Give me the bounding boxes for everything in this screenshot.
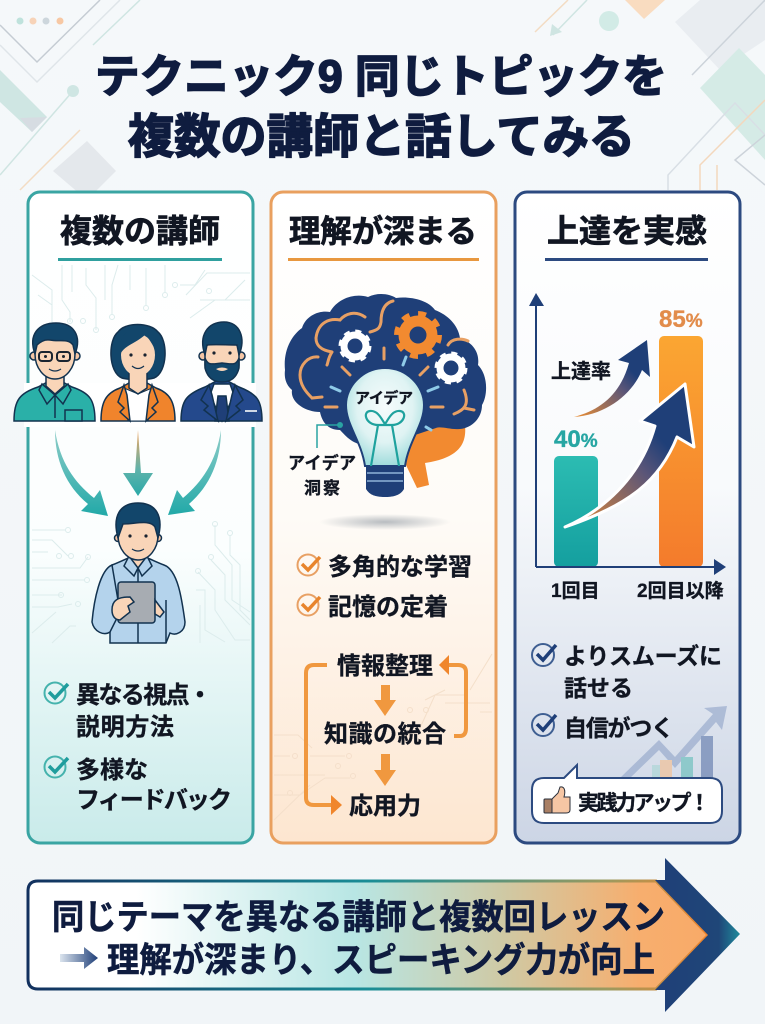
checklist: instructors: フィードバック <box>76 787 232 814</box>
x labels: 2回目以降 <box>637 580 724 602</box>
checklist: understanding: 記憶の定着 <box>328 594 448 621</box>
callout: practical skill up <box>532 765 722 823</box>
bulb glass <box>346 368 424 466</box>
callout line <box>317 422 343 448</box>
label in bulb: アイデア <box>355 389 413 407</box>
title <box>95 51 667 163</box>
checklist: instructors: 説明方法 <box>76 714 174 741</box>
x labels: 1回目 <box>551 581 600 602</box>
brain folds <box>300 301 474 414</box>
x labels <box>551 580 724 602</box>
background growth graphic <box>620 706 727 778</box>
banner body <box>28 881 708 989</box>
checklist: progress: 話せる <box>564 675 633 701</box>
bar chart <box>529 293 726 602</box>
label: 上達率: 上達率 <box>551 360 611 383</box>
banner text: 同じテーマを異なる講師と複数回レッスン <box>52 899 665 937</box>
gear: white left <box>342 332 368 360</box>
icon: brain with light bulb <box>285 294 486 530</box>
arrow: middle instructor to student <box>123 430 153 496</box>
panel: deeper understanding <box>271 192 496 843</box>
value: 85%: 85% <box>659 306 703 333</box>
callout: practical skill up: 実践力アップ！ <box>578 792 710 815</box>
bar: second lesson onward <box>659 336 703 567</box>
check icon <box>298 554 320 576</box>
flow diagram <box>306 653 466 820</box>
orange brain stem <box>406 425 465 488</box>
brain <box>285 294 486 445</box>
arrow: down <box>374 685 396 716</box>
icon: instructor with glasses <box>14 323 95 421</box>
arrow: small rising <box>574 340 650 417</box>
panel frame: orange <box>271 192 496 843</box>
heading: 複数の講師: 複数の講師 <box>60 213 220 249</box>
checklist: understanding: 多角的な学習 <box>328 554 472 581</box>
arrow: right instructor to student <box>168 430 221 515</box>
checklist: progress <box>532 643 722 741</box>
checklist: understanding <box>298 554 472 621</box>
light rays <box>325 348 443 430</box>
checklist: progress: 自信がつく <box>564 715 674 741</box>
flow diagram: 知識の統合 <box>324 721 446 748</box>
icon: thumbs up <box>544 787 570 813</box>
check icon <box>298 594 320 616</box>
banner text: 理解が深まり、スピーキング力が向上 <box>107 941 655 980</box>
filament <box>366 411 404 466</box>
flow diagram: 応用力 <box>349 793 421 820</box>
value: 40%: 40% <box>554 426 598 453</box>
panel: feel the progress <box>515 192 740 843</box>
heading: 上達を実感: 上達を実感 <box>547 213 707 249</box>
bar: first lesson <box>554 456 598 567</box>
check icon <box>44 682 68 704</box>
check icon <box>532 714 556 736</box>
summary banner arrow <box>28 858 740 1012</box>
arrow: down <box>374 754 396 786</box>
bulb base <box>366 466 404 497</box>
heading: 理解が深まる: 理解が深まる <box>289 213 477 249</box>
callout label: 洞察 <box>304 479 340 498</box>
checklist: instructors <box>44 682 232 814</box>
panel: multiple instructors <box>14 192 262 843</box>
title: テクニック9 同じトピックを <box>95 51 667 102</box>
arrow: loop right <box>439 655 466 736</box>
panel frame: teal <box>28 192 253 843</box>
checklist: progress: よりスムーズに <box>564 643 722 669</box>
background decoration <box>0 0 765 200</box>
icon: female instructor <box>101 324 175 421</box>
checklist: instructors: 異なる視点・ <box>76 682 212 709</box>
bulb shadow <box>319 514 451 530</box>
callout label: アイデア <box>288 453 356 473</box>
title: 複数の講師と話してみる <box>128 110 635 163</box>
arrow: big rising <box>565 384 694 527</box>
panel frame: navy <box>515 192 740 843</box>
gear: orange <box>398 315 438 355</box>
check icon <box>532 644 556 666</box>
arrow: left instructor to student <box>55 430 108 516</box>
checklist: instructors: 多様な <box>76 757 148 784</box>
icon: student with tablet <box>92 503 185 643</box>
circuit decoration <box>274 654 492 820</box>
flow diagram: 情報整理 <box>337 653 433 680</box>
circuit decoration <box>32 265 250 643</box>
gear: white right <box>438 354 464 382</box>
callout label <box>288 453 356 498</box>
small arrow <box>60 947 98 969</box>
arrowhead <box>655 858 740 1012</box>
banner text <box>52 899 665 980</box>
arrow: loop left <box>306 665 342 815</box>
icon: bearded instructor <box>181 322 262 421</box>
band behind people <box>24 383 256 427</box>
axes <box>529 293 726 575</box>
check icon <box>44 756 68 778</box>
